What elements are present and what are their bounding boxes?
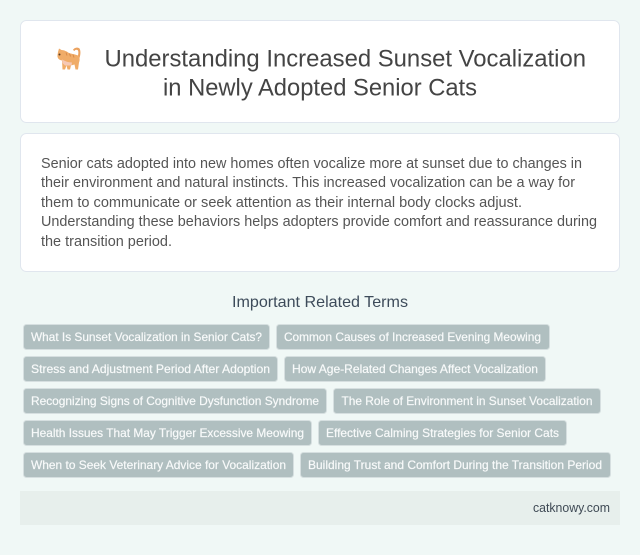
text block: summary: them to communicate or seek attention as their internal body clocks adjust.: [41, 195, 522, 211]
panel: header: [20, 20, 620, 122]
tags: related terms: Health Issues That May Trigger Excessive Meowing: [31, 426, 304, 440]
title: in Newly Adopted Senior Cats: [163, 74, 477, 102]
text block: summary: Understanding these behaviors helps adopters provide comfort and reassurance during: [41, 214, 597, 230]
tags: related terms: How Age-Related Changes Affect Vocalization: [292, 362, 538, 376]
tags: related terms: Recognizing Signs of Cognitive Dysfunction Syndrome: [31, 394, 319, 408]
tags: related terms: Building Trust and Comfort During the Transition Period: [308, 458, 602, 472]
title: [104, 46, 586, 102]
heading: related terms: Important Related Terms: [232, 294, 408, 311]
tags: related terms: [24, 324, 610, 478]
text block: summary: [41, 156, 597, 250]
tags: related terms: What Is Sunset Vocalization in Senior Cats?: [31, 330, 262, 344]
icon: cat: [57, 48, 80, 70]
text block: summary: Senior cats adopted into new homes often vocalize more at sunset due to changes in: [41, 156, 582, 172]
footer: [20, 491, 620, 525]
panel: summary text: [20, 134, 620, 272]
tags: related terms: Effective Calming Strategies for Senior Cats: [326, 426, 559, 440]
title: Understanding Increased Sunset Vocalization: [104, 46, 586, 72]
tags: related terms: The Role of Environment in Sunset Vocalization: [342, 394, 592, 408]
tags: related terms: Common Causes of Increased Evening Meowing: [284, 330, 541, 344]
tags: related terms: When to Seek Veterinary Advice for Vocalization: [31, 458, 286, 472]
text block: summary: the transition period.: [41, 234, 172, 250]
text block: summary: their environment and natural instincts. This increased vocalization can be a way for: [41, 175, 575, 191]
footer source text: catknowy.com: [533, 500, 610, 515]
tags: related terms: Stress and Adjustment Period After Adoption: [31, 362, 270, 376]
